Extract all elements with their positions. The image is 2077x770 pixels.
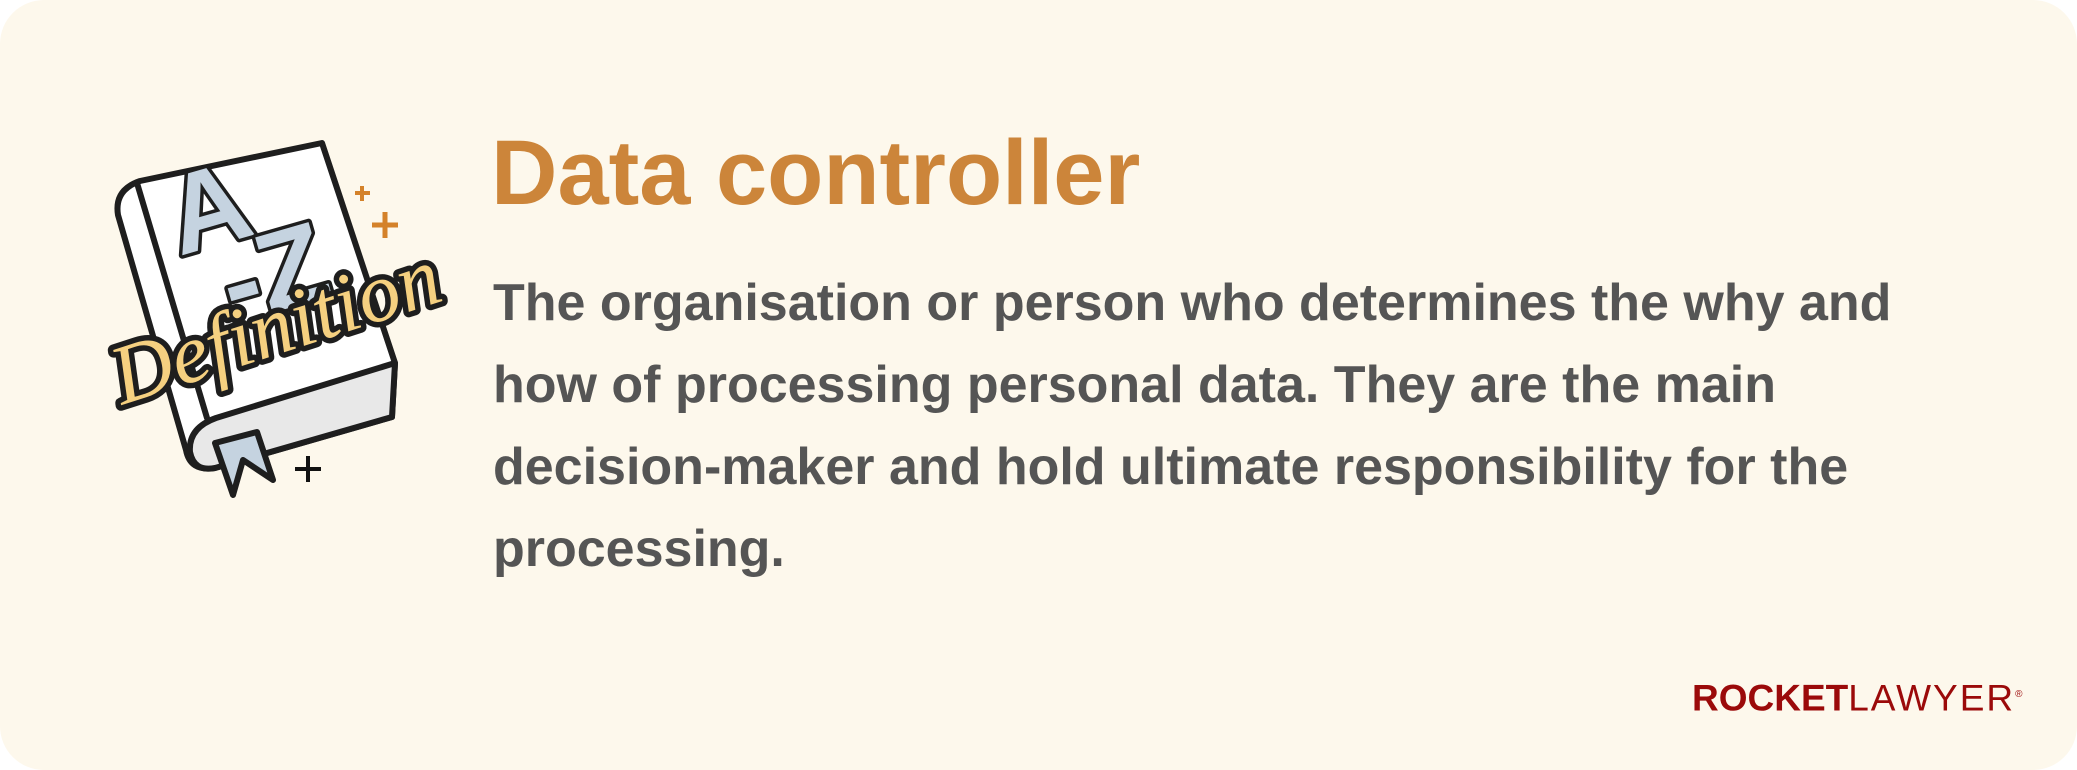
text block: definition: how of processing personal data. They are the main <box>493 356 1776 414</box>
icon: definition book: Definition <box>98 229 452 423</box>
icon: definition book: A <box>152 137 264 279</box>
text block: definition: The organisation or person who determines the why and <box>493 274 1891 332</box>
logo: Rocket Lawyer: ROCKETLAWYER® <box>1692 677 2022 718</box>
text block: definition: processing. <box>493 520 785 578</box>
title: Data controller <box>491 122 1140 224</box>
icon: definition book: -Z <box>206 198 342 347</box>
text block: definition <box>493 274 1891 578</box>
text block: definition: decision-maker and hold ultimate responsibility for the <box>493 438 1848 496</box>
